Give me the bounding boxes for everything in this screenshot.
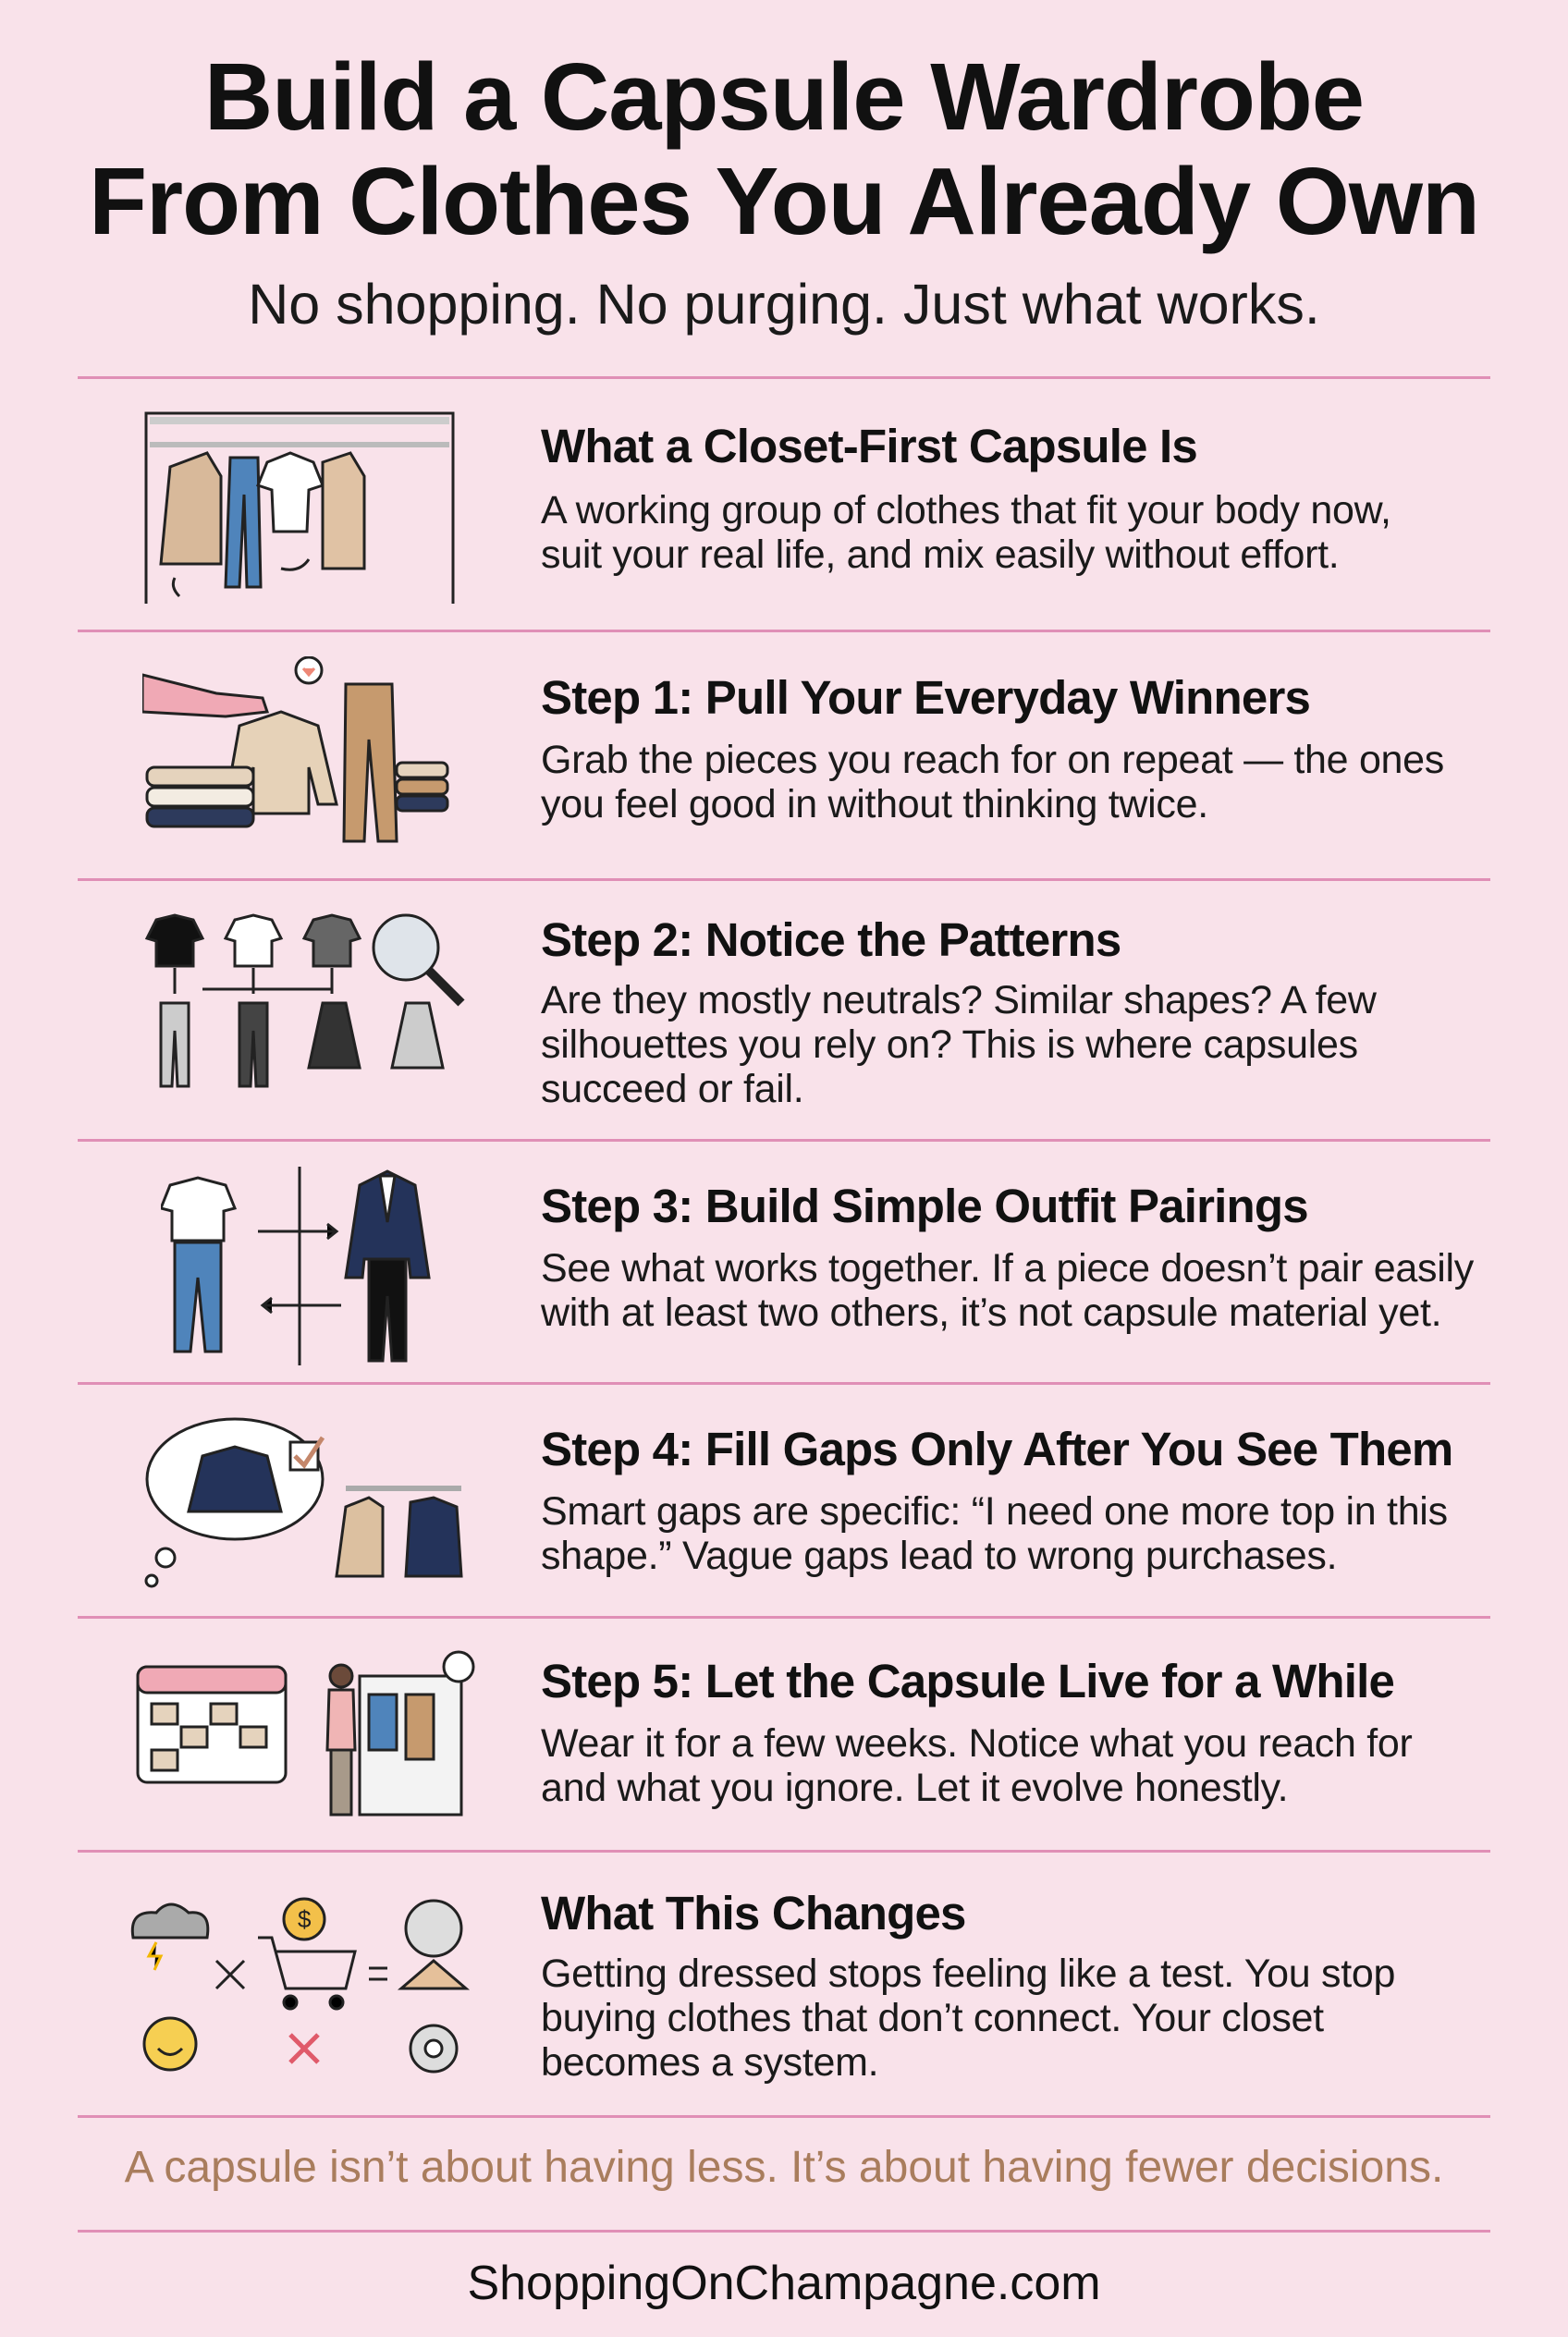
title bbox=[89, 43, 1479, 254]
section: step 4 bbox=[144, 1418, 1452, 1588]
heading: What This Changes bbox=[541, 1887, 966, 1939]
text: and what you ignore. Let it evolve honestly. bbox=[541, 1766, 1288, 1810]
text: Are they mostly neutrals? Similar shapes? A few bbox=[541, 978, 1377, 1022]
text: Grab the pieces you reach for on repeat — the ones bbox=[541, 738, 1444, 782]
icon: calendar and closet bbox=[137, 1651, 475, 1816]
text bbox=[541, 978, 1377, 1111]
icon: equation of stress, cart and system bbox=[131, 1897, 470, 2073]
section: what this changes bbox=[131, 1887, 1395, 2085]
title: Build a Capsule Wardrobe bbox=[204, 43, 1364, 150]
section: step 3 bbox=[161, 1167, 1474, 1365]
heading: Step 2: Notice the Patterns bbox=[541, 913, 1121, 966]
heading: What a Closet-First Capsule Is bbox=[541, 420, 1197, 472]
text bbox=[541, 488, 1391, 577]
heading: Step 3: Build Simple Outfit Pairings bbox=[541, 1180, 1308, 1232]
text: becomes a system. bbox=[541, 2040, 878, 2085]
text: See what works together. If a piece doesn’t pair easily bbox=[541, 1246, 1474, 1291]
icon: closet rail bbox=[144, 412, 455, 604]
tagline: A capsule isn’t about having less. It’s about having fewer decisions. bbox=[125, 2143, 1443, 2192]
section: closet-first capsule bbox=[144, 412, 1391, 604]
icon: thought bubble and rack bbox=[144, 1418, 463, 1588]
heading: Step 1: Pull Your Everyday Winners bbox=[541, 671, 1310, 724]
icon: tops, bottoms and magnifier bbox=[144, 913, 464, 1087]
text: shape.” Vague gaps lead to wrong purchases. bbox=[541, 1534, 1337, 1578]
text: Smart gaps are specific: “I need one more top in this bbox=[541, 1489, 1448, 1534]
icon: equation of stress, cart and system: $ bbox=[298, 1905, 312, 1933]
text bbox=[541, 1721, 1413, 1810]
text: suit your real life, and mix easily without effort. bbox=[541, 532, 1339, 577]
text bbox=[541, 738, 1444, 826]
heading: Step 4: Fill Gaps Only After You See Them bbox=[541, 1423, 1452, 1475]
text: you feel good in without thinking twice. bbox=[541, 782, 1208, 826]
title: From Clothes You Already Own bbox=[89, 148, 1479, 254]
footer: ShoppingOnChampagne.com bbox=[467, 2257, 1101, 2310]
text: Wear it for a few weeks. Notice what you reach for bbox=[541, 1721, 1413, 1766]
section: step 5 bbox=[137, 1651, 1413, 1816]
text: buying clothes that don’t connect. Your closet bbox=[541, 1996, 1324, 2040]
text bbox=[541, 1246, 1474, 1335]
heading: Step 5: Let the Capsule Live for a While bbox=[541, 1655, 1394, 1707]
text bbox=[541, 1489, 1448, 1578]
section: step 2 bbox=[144, 913, 1377, 1111]
text: silhouettes you rely on? This is where capsules bbox=[541, 1022, 1358, 1067]
subtitle: No shopping. No purging. Just what works. bbox=[248, 273, 1320, 336]
text: with at least two others, it’s not capsule material yet. bbox=[541, 1291, 1441, 1335]
text: Getting dressed stops feeling like a test. You stop bbox=[541, 1952, 1395, 1996]
icon: hand pulling clothes bbox=[142, 656, 449, 843]
icon: outfit pairing bbox=[161, 1167, 431, 1365]
section: step 1 bbox=[142, 656, 1444, 843]
text bbox=[541, 1952, 1395, 2085]
text: succeed or fail. bbox=[541, 1067, 803, 1111]
text: A working group of clothes that fit your body now, bbox=[541, 488, 1391, 532]
